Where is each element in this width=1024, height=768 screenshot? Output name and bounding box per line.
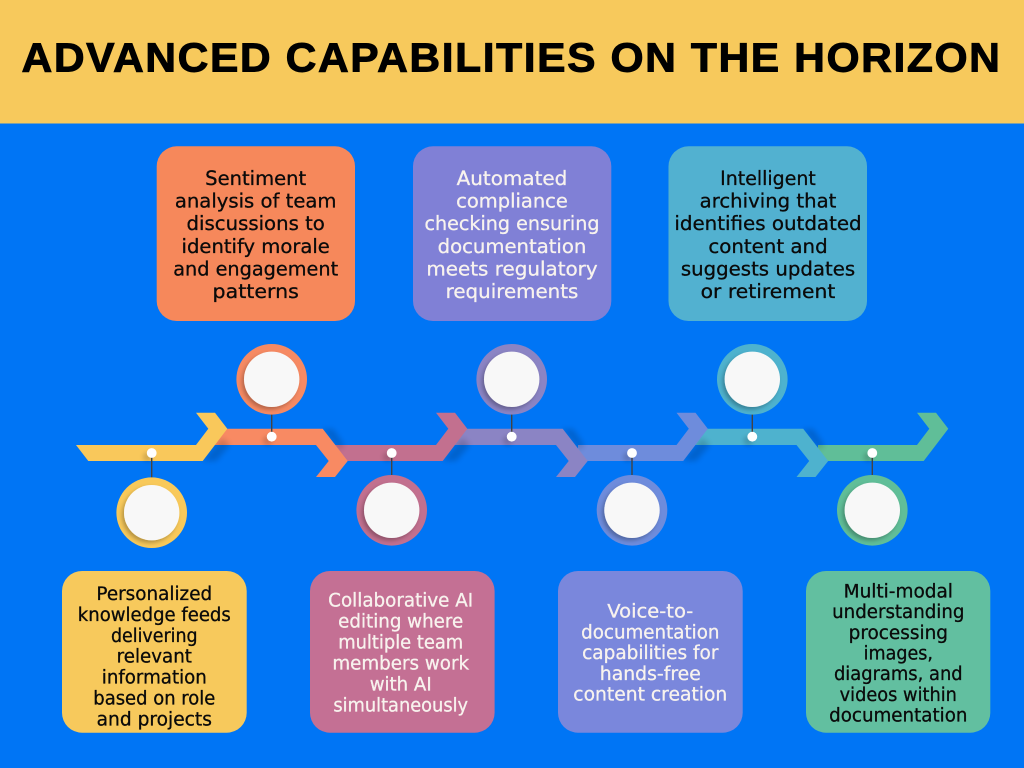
panel: collaborative AI editing: editing where (338, 612, 463, 633)
panel: voice to documentation: capabilities for (582, 643, 719, 664)
panel: sentiment analysis: identify morale (182, 235, 330, 258)
panel: voice to documentation: content creation (573, 685, 727, 706)
panel: multi-modal understanding: videos within (840, 685, 957, 706)
segment 4: purple (452, 429, 588, 477)
panel: sentiment analysis: patterns (213, 280, 299, 303)
panel: multi-modal understanding: processing (849, 623, 948, 644)
panel: multi-modal understanding: diagrams, and (834, 664, 963, 685)
panel: voice to documentation: documentation (581, 622, 719, 644)
panel: collaborative AI editing: simultaneously (333, 696, 468, 717)
segment 3: rose (331, 413, 470, 461)
panel: intelligent archiving: suggests updates (681, 257, 855, 280)
panel: multi-modal understanding: images, (864, 644, 933, 664)
panel: intelligent archiving: Intelligent (720, 167, 816, 190)
panel: sentiment analysis: and engagement (173, 257, 339, 280)
panel: multi-modal understanding: Multi-modal (844, 581, 953, 602)
panel: multi-modal understanding (806, 571, 990, 733)
header band (0, 0, 1024, 124)
panel: personalized knowledge feeds: Personalized (96, 584, 212, 605)
segment 2: orange (212, 429, 348, 477)
panel: automated compliance: requirements (446, 280, 578, 303)
panel: collaborative AI editing: Collaborative AI (328, 591, 473, 612)
panel: collaborative AI editing: members work (332, 654, 470, 675)
segment 6: teal (692, 429, 828, 477)
panel: automated compliance: meets regulatory (426, 257, 598, 280)
panel: collaborative AI editing: multiple team (338, 633, 463, 654)
panel: automated compliance (413, 146, 611, 321)
timeline arrow band (76, 413, 948, 477)
node 5: periwinkle circle and connector (597, 448, 667, 546)
panel: intelligent archiving: archiving that (700, 190, 837, 213)
panel: intelligent archiving: identifies outdated (674, 212, 862, 235)
panel: sentiment analysis (157, 146, 355, 321)
node 7: green circle and connector (837, 448, 908, 546)
panel: sentiment analysis: analysis of team (175, 190, 337, 213)
node 1: yellow circle and connector (116, 448, 187, 548)
panel: personalized knowledge feeds: based on role (93, 688, 215, 710)
title: ADVANCED CAPABILITIES ON THE HORIZON (22, 35, 1001, 81)
panel: intelligent archiving (668, 146, 867, 321)
segment 7: green (818, 413, 948, 461)
panel: automated compliance: Automated (457, 167, 567, 190)
panel: sentiment analysis: discussions to (187, 212, 325, 235)
panel: personalized knowledge feeds (62, 571, 247, 733)
panel: personalized knowledge feeds: relevant (117, 647, 192, 668)
panel: intelligent archiving: content and (708, 235, 828, 258)
segment 5: periwinkle (578, 413, 710, 461)
panel: voice to documentation: hands-free (600, 664, 701, 685)
segment 1: yellow (76, 413, 230, 461)
panel: automated compliance: compliance (456, 190, 568, 213)
panel: personalized knowledge feeds: knowledge feeds (78, 605, 231, 626)
node 4: purple circle and connector (476, 344, 547, 446)
panel: voice to documentation (558, 571, 743, 733)
panel: personalized knowledge feeds: information (102, 668, 207, 689)
panel: automated compliance: documentation (438, 235, 586, 258)
panel: personalized knowledge feeds: and projects (97, 709, 212, 730)
node 2: orange circle and connector (236, 344, 307, 446)
panel: sentiment analysis: Sentiment (205, 167, 307, 190)
panel: voice to documentation: Voice-to- (607, 602, 693, 623)
panel: personalized knowledge feeds: delivering (111, 626, 198, 647)
node 3: rose circle and connector (356, 448, 427, 546)
panel: collaborative AI editing: with AI (370, 675, 432, 696)
panel: automated compliance: checking ensuring (424, 212, 600, 235)
panel: intelligent archiving: or retirement (701, 280, 836, 303)
node 6: teal circle and connector (717, 344, 788, 446)
panel: collaborative AI editing (310, 571, 495, 733)
panel: multi-modal understanding: documentation (829, 706, 967, 727)
panel: multi-modal understanding: understanding (832, 602, 964, 623)
